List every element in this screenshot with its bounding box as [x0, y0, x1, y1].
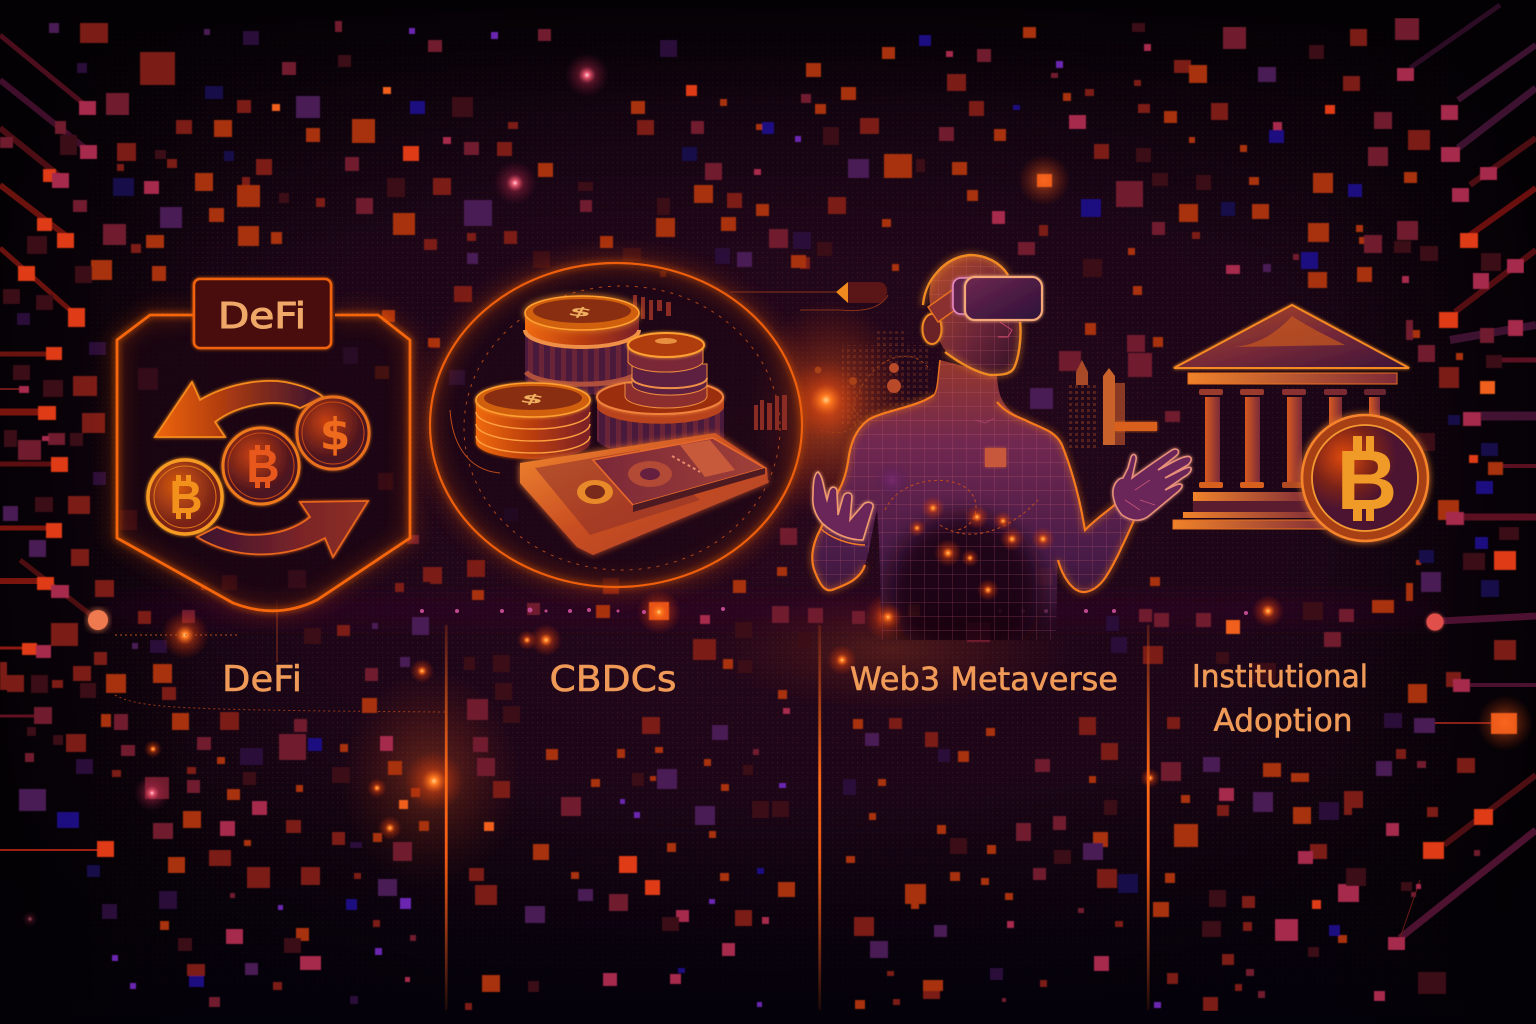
- icon: large bitcoin coin: [1302, 415, 1428, 541]
- icon: dollar coin: [297, 397, 369, 469]
- bank columns: [1199, 389, 1386, 488]
- decoration: arrow tag above person: [730, 282, 888, 311]
- panel: CBDCs coin ring: [430, 263, 802, 587]
- icon: bitcoin coin left: [148, 460, 222, 534]
- decoration: dotted data chart left of person: [814, 328, 930, 433]
- circuit overlay on chest: [885, 480, 1038, 534]
- label: Web3 Metaverse: Web3 Metaverse: [850, 660, 1118, 698]
- coin stack: right: [597, 333, 724, 456]
- label: DeFi: DeFi: [222, 659, 302, 700]
- panel: institutional bank: [1173, 305, 1428, 541]
- mini bar charts: [633, 295, 787, 430]
- bank steps: [1173, 492, 1333, 529]
- ring: [430, 263, 802, 587]
- body: [806, 360, 1140, 640]
- banknote stack: [520, 433, 768, 555]
- bank roof: [1174, 305, 1409, 384]
- divider lines: [115, 600, 1149, 1010]
- coin stack: left: $: [517, 391, 548, 407]
- chest light sparks: [874, 496, 1055, 631]
- icon: dollar coin: $: [320, 409, 350, 460]
- coin stack: left: [476, 383, 590, 459]
- icon: counter-clockwise arrow: [155, 381, 323, 437]
- label: Institutional Adoption: [1192, 659, 1368, 739]
- decoration: dotted towers right of person: [1067, 360, 1157, 450]
- horizontal dot row: [420, 607, 1248, 615]
- icon: bitcoin coin middle: B: [246, 440, 280, 492]
- figure: person in VR headset: [800, 250, 1191, 665]
- head: [920, 250, 1030, 380]
- icon: large bitcoin coin: B: [1337, 433, 1397, 527]
- DeFi badge: DeFi: [218, 296, 306, 337]
- icon: clockwise arrow: [197, 501, 368, 557]
- chest orb: [874, 462, 910, 498]
- VR headset: [928, 277, 1042, 322]
- panel: DeFi shield: [117, 279, 410, 611]
- label: Institutional Adoption: Institutional: [1192, 659, 1368, 695]
- DeFi badge: [194, 279, 331, 348]
- ear: [922, 314, 942, 344]
- coin stack: large back: $: [565, 304, 596, 320]
- icon: bitcoin coin left: B: [169, 471, 203, 523]
- shield outline: [117, 315, 410, 611]
- right hand: [1113, 449, 1191, 520]
- coin stack: large back: [525, 296, 639, 395]
- end cap dots: [88, 610, 1444, 630]
- label: CBDCs: CBDCs: [550, 659, 676, 700]
- chest square: [985, 448, 1006, 467]
- left hand: [813, 472, 873, 545]
- icon: bitcoin coin middle: [223, 428, 299, 504]
- label: Institutional Adoption: Adoption: [1214, 703, 1352, 739]
